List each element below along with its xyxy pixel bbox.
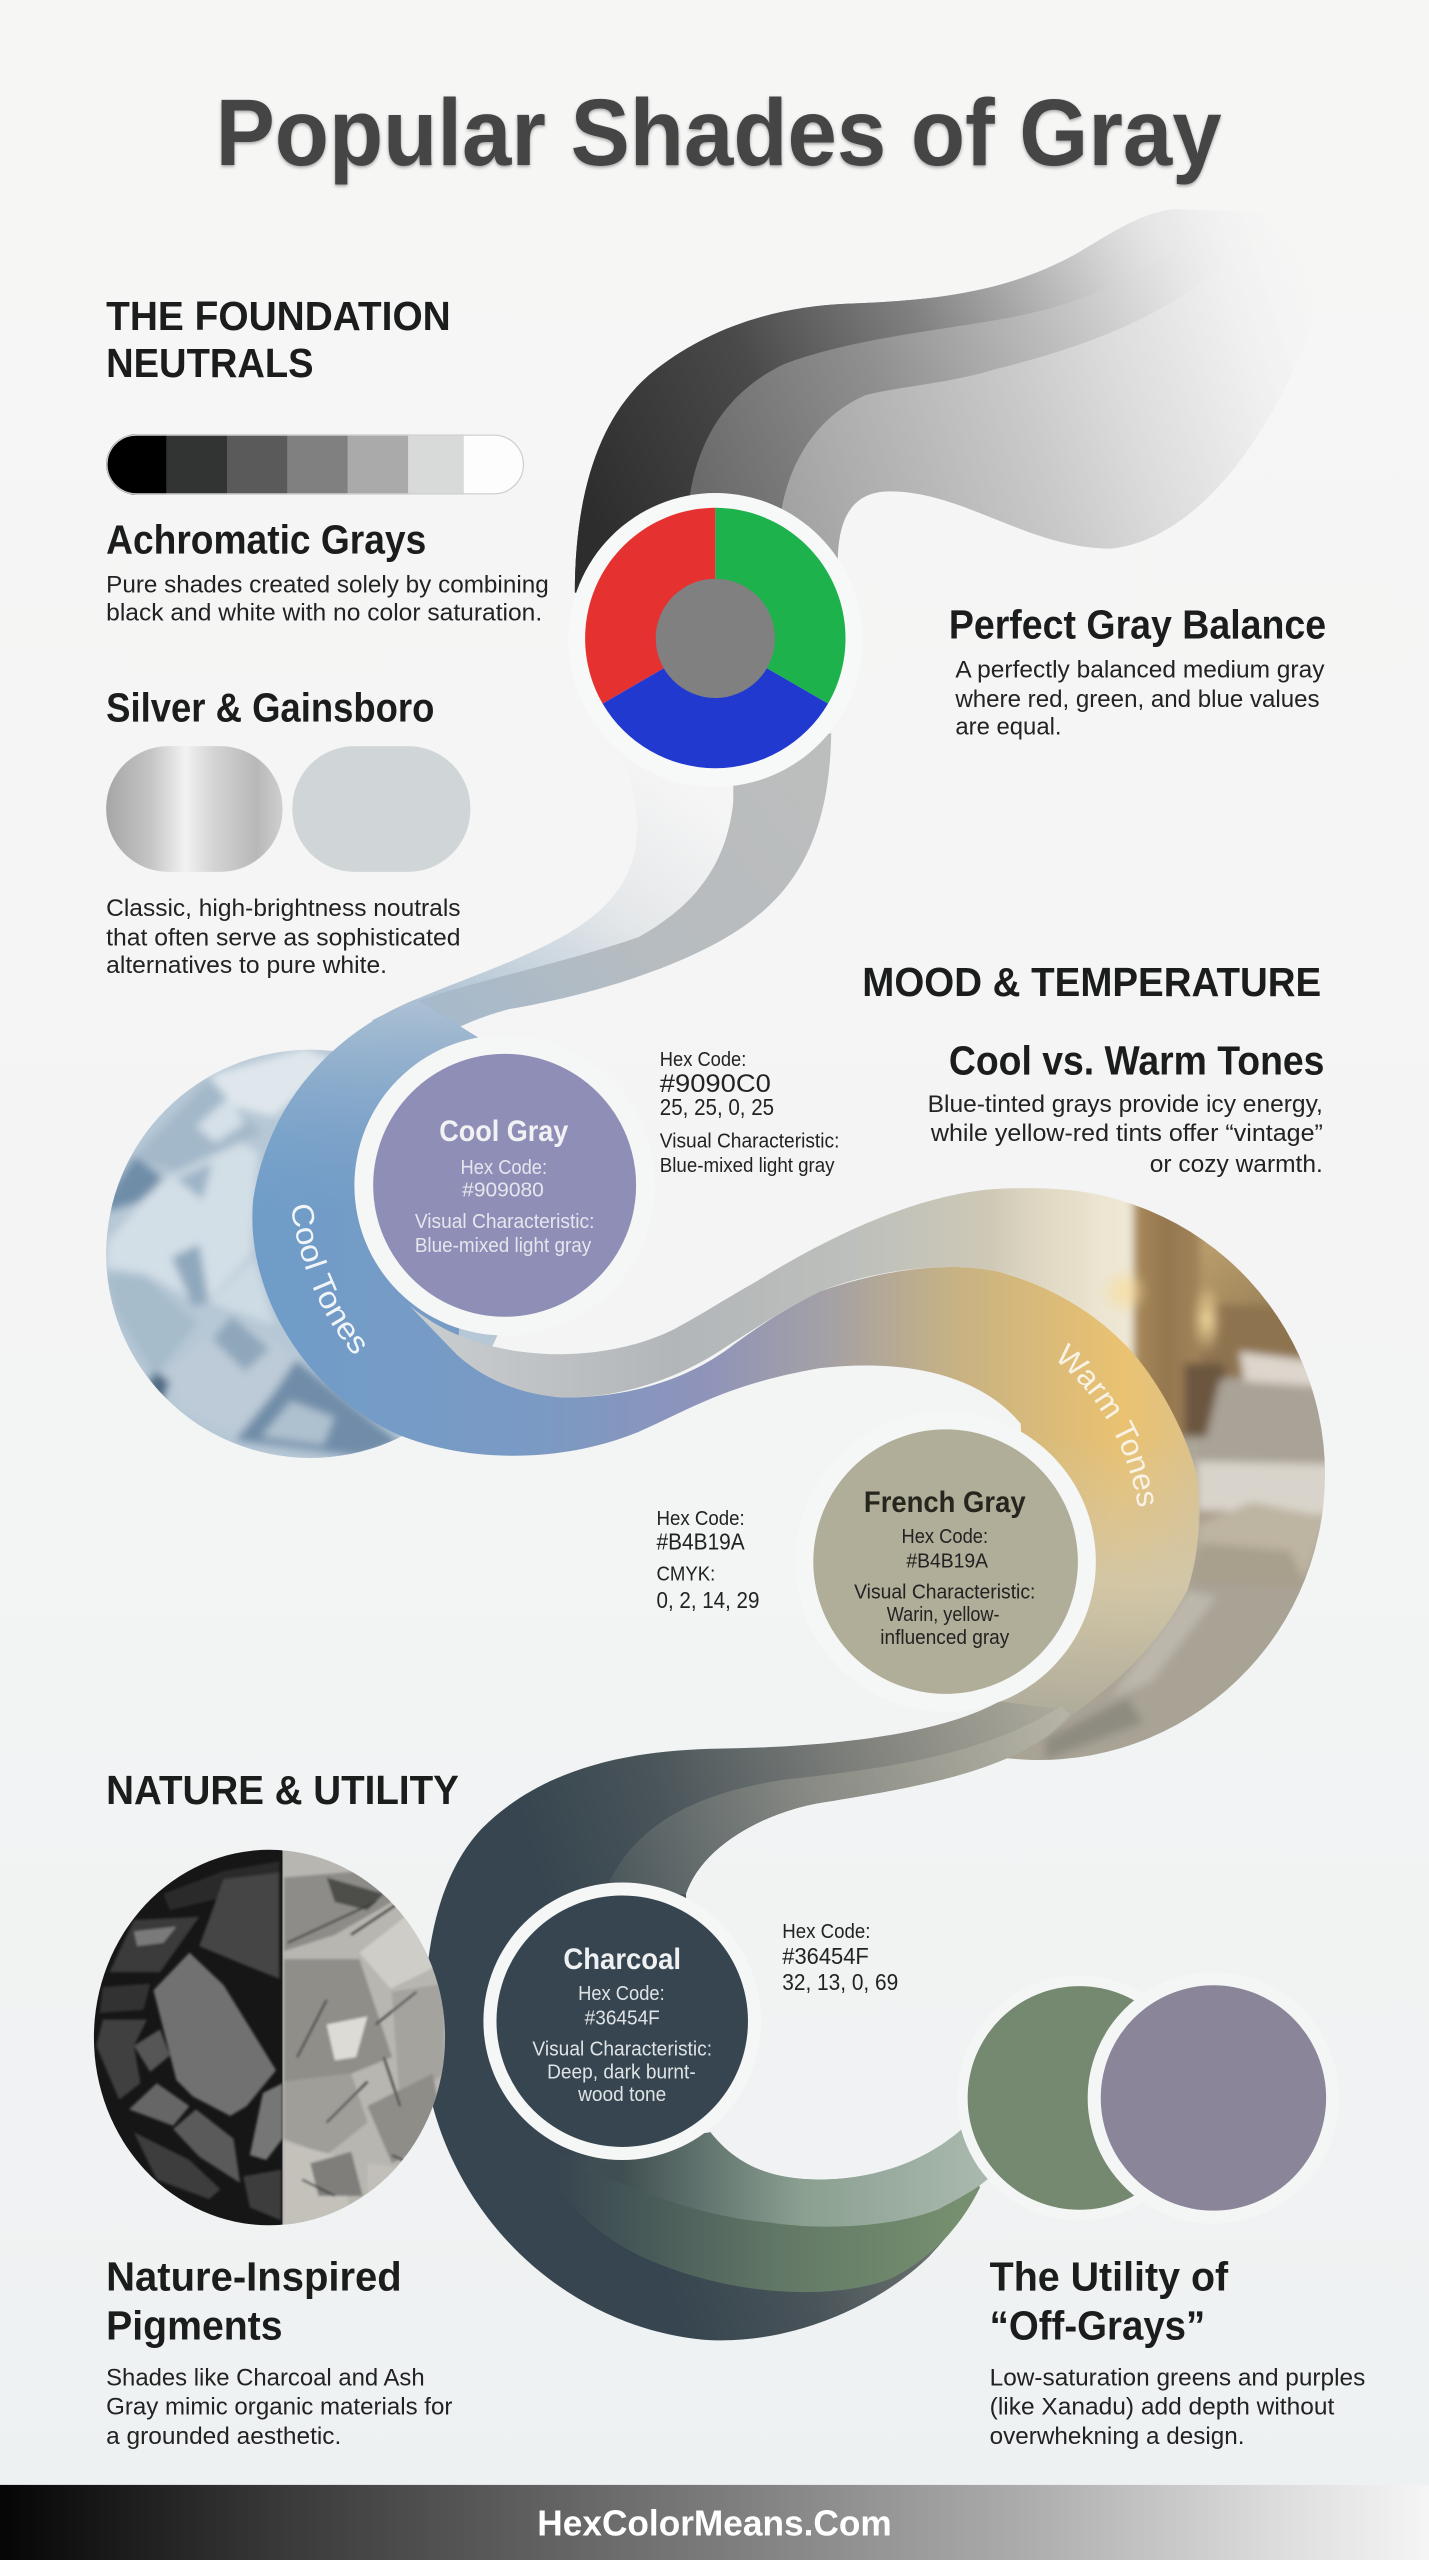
text block: perfect gray balance: [949, 601, 1326, 741]
text block: nature-inspired pigments: Pigments: [106, 2303, 283, 2349]
text block: the utility of off-grays: overwhekning a design.: [990, 2423, 1244, 2450]
swatch: charcoal: #36454F: [585, 2007, 660, 2029]
heading: mood and temperature: MOOD & TEMPERATURE: [862, 959, 1321, 1005]
label: french gray values: CMYK:: [657, 1563, 715, 1585]
swatch: french gray: #B4B19A: [906, 1550, 988, 1572]
label: cool gray values: Hex Code:: [660, 1049, 746, 1071]
swatch: silver: [106, 746, 283, 872]
ribbon: white and gray strands from dial to cool arc: [372, 733, 831, 1078]
swatch: cool gray: #909080: [462, 1180, 544, 1202]
label: charcoal values: Hex Code:: [782, 1921, 870, 1943]
image: charcoal and ash: [90, 1845, 454, 2237]
text block: cool vs warm tones: [928, 1037, 1324, 1178]
footer bar: HexColorMeans.Com: [537, 2503, 892, 2544]
text block: the utility of off-grays: “Off-Grays”: [990, 2303, 1205, 2349]
title: Popular Shades of Gray: [216, 80, 1222, 186]
ribbon label: cool tones: Cool Tones: [292, 1204, 365, 1354]
red sector: [585, 508, 715, 704]
text block: the utility of off-grays: The Utility of: [990, 2254, 1229, 2300]
label: cool gray values: [660, 1049, 839, 1177]
panel: rgb balance dial: [568, 493, 862, 787]
text block: cool vs warm tones: while yellow-red tints offer “vintage”: [930, 1120, 1323, 1147]
label: cool gray values: #9090C0: [660, 1070, 771, 1098]
swatch: french gray: [795, 1411, 1096, 1712]
text block: perfect gray balance: Perfect Gray Balance: [949, 601, 1326, 647]
swatch: french gray: Warin, yellow-: [887, 1604, 999, 1626]
ribbon: green strands: [537, 2119, 996, 2292]
swatch: french gray: French Gray: [864, 1486, 1026, 1519]
swatch: charcoal: Hex Code:: [578, 1983, 665, 2005]
text block: perfect gray balance: A perfectly balanced medium gray: [955, 657, 1325, 684]
text block: nature-inspired pigments: [106, 2254, 452, 2450]
text block: achromatic grays: Pure shades created solely by combining: [106, 572, 549, 599]
ribbon: warm to cool main band: [252, 999, 1200, 1755]
image: cozy bedroom: [1007, 1188, 1325, 1760]
swatch: cool gray: Blue-mixed light gray: [415, 1235, 592, 1257]
label: french gray values: #B4B19A: [657, 1528, 745, 1554]
label: cool gray values: Blue-mixed light gray: [660, 1155, 835, 1177]
swatch: cool gray: [354, 1035, 655, 1336]
label: charcoal values: #36454F: [782, 1943, 869, 1969]
heading: silver and gainsboro: Silver & Gainsboro: [106, 685, 434, 731]
text block: the utility of off-grays: (like Xanadu) add depth without: [990, 2394, 1334, 2421]
swatch: charcoal: Visual Characteristic:: [532, 2039, 712, 2061]
blue sector: [603, 638, 828, 768]
text block: the utility of off-grays: Low-saturation greens and purples: [990, 2364, 1365, 2391]
text block: nature-inspired pigments: Gray mimic organic materials for: [106, 2394, 452, 2421]
footer bar: [0, 2485, 1429, 2560]
text block: cool vs warm tones: or cozy warmth.: [1150, 1151, 1323, 1178]
text block: cool vs warm tones: Blue-tinted grays provide icy energy,: [928, 1091, 1323, 1118]
label: french gray values: 0, 2, 14, 29: [657, 1587, 759, 1613]
label: cool gray values: Visual Characteristic:: [660, 1131, 839, 1153]
heading: the foundation neutrals: THE FOUNDATION: [106, 293, 451, 339]
text block: achromatic grays: black and white with no color saturation.: [106, 599, 542, 626]
ribbon: upper gray strand: [410, 1188, 1135, 1398]
text block: nature-inspired pigments: Shades like Charcoal and Ash: [106, 2364, 425, 2391]
achromatic swatch bar: [106, 434, 524, 495]
swatch: cool gray: Hex Code:: [461, 1157, 547, 1179]
text block: silver description: Classic, high-brightness noutrals: [106, 895, 461, 922]
label: french gray values: [657, 1508, 759, 1613]
heading: the foundation neutrals: NEUTRALS: [106, 340, 314, 386]
swatch: gainsboro: [292, 746, 470, 872]
swatch: french gray: Visual Characteristic:: [854, 1581, 1035, 1603]
heading: nature and utility: NATURE & UTILITY: [106, 1767, 459, 1813]
text block: silver description: that often serve as sophisticated: [106, 924, 461, 951]
swatch: cool gray: Visual Characteristic:: [415, 1211, 594, 1233]
swatch: french gray: influenced gray: [880, 1627, 1010, 1649]
swatch: off-gray green: [957, 1976, 1202, 2220]
label: charcoal values: [782, 1921, 898, 1995]
text block: achromatic grays: [106, 516, 549, 626]
text block: silver description: [106, 895, 461, 979]
ribbon: gray wave from upper right: [575, 209, 1326, 638]
text block: silver description: alternatives to pure white.: [106, 952, 387, 979]
label: cool gray values: 25, 25, 0, 25: [660, 1094, 774, 1120]
swatch: charcoal: Charcoal: [563, 1943, 681, 1976]
text block: the utility of off-grays: [990, 2254, 1365, 2450]
gray center: [656, 579, 775, 698]
swatch: charcoal: [483, 1882, 761, 2160]
image: ice texture: [106, 1050, 498, 1458]
green sector: [715, 508, 846, 704]
label: french gray values: Hex Code:: [657, 1508, 745, 1530]
label: charcoal values: 32, 13, 0, 69: [782, 1969, 898, 1995]
text block: nature-inspired pigments: Nature-Inspired: [106, 2254, 402, 2300]
swatch: french gray: Hex Code:: [901, 1526, 988, 1548]
text block: perfect gray balance: are equal.: [955, 714, 1062, 741]
swatch: cool gray: Cool Gray: [439, 1115, 569, 1148]
swatch: charcoal: wood tone: [577, 2084, 666, 2106]
text block: cool vs warm tones: Cool vs. Warm Tones: [949, 1037, 1324, 1083]
swatch: off-gray purple: [1088, 1972, 1339, 2224]
ribbon: charcoal arc: [425, 1701, 1075, 2340]
text block: nature-inspired pigments: a grounded aesthetic.: [106, 2423, 341, 2450]
ribbon label: warm tones: Warm Tones: [1058, 1342, 1154, 1506]
swatch: charcoal: Deep, dark burnt-: [547, 2061, 696, 2083]
text block: perfect gray balance: where red, green, and blue values: [954, 686, 1320, 713]
text block: achromatic grays: Achromatic Grays: [106, 516, 426, 562]
heading: the foundation neutrals: [106, 293, 451, 386]
